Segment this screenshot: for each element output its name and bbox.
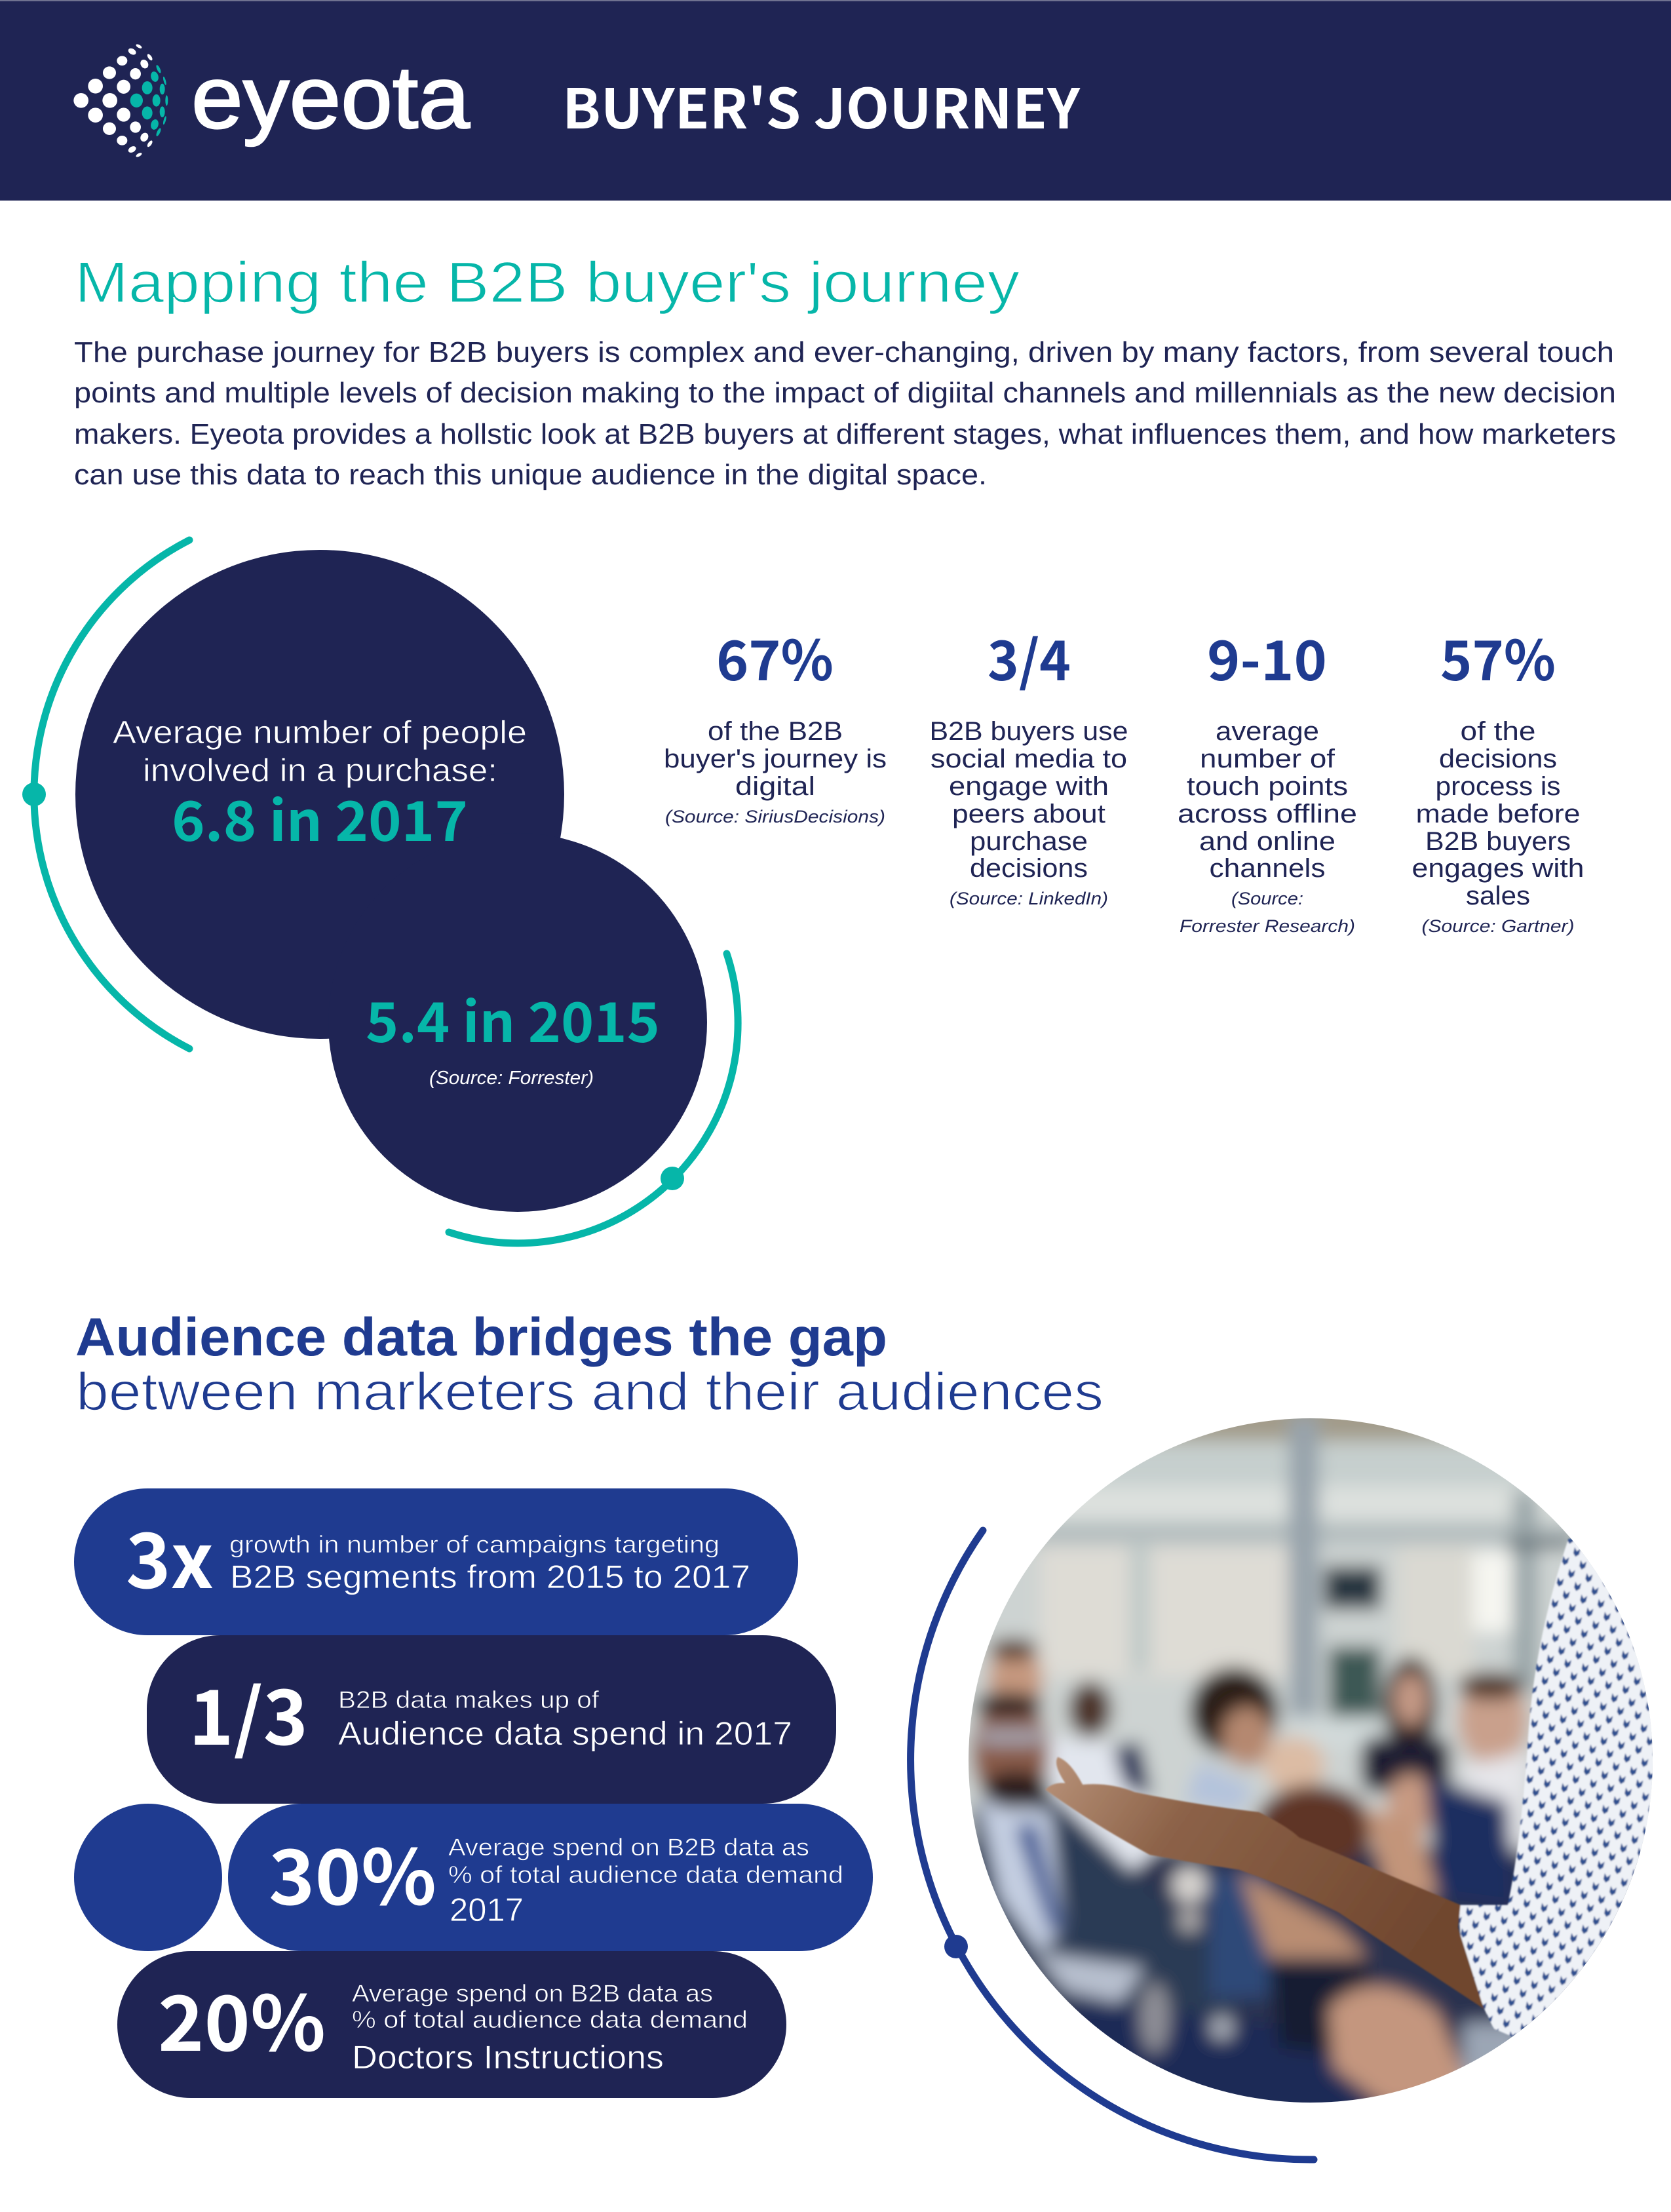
- icon: teal dot on large ring: [22, 783, 46, 806]
- heading: audience data: Audience data bridges the gap: [75, 1308, 887, 1367]
- text: Audience data spend in 2017: [338, 1715, 792, 1752]
- description: (Source: SiriusDecisions): [665, 807, 885, 826]
- description: digital: [735, 772, 815, 801]
- panel: stat 3/4: [929, 617, 1128, 908]
- description: (Source:: [1231, 889, 1303, 908]
- text: % of total audience data demand: [352, 2006, 748, 2033]
- text: % of total audience data demand: [448, 1861, 843, 1888]
- text: purchase caption: [113, 715, 527, 788]
- description: touch points: [1187, 772, 1348, 801]
- text block: introduction paragraph: [74, 336, 1616, 491]
- decorative blue circle: [74, 1804, 222, 1951]
- text block: introduction paragraph: makers. Eyeota provides a hollstic look at B2B buyers at different stages, what influences them, and how marketers: [74, 418, 1616, 450]
- number: 20%: [158, 1963, 326, 2073]
- text: B2B data makes up of: [338, 1686, 600, 1713]
- number: 67%: [716, 617, 834, 697]
- text: [338, 1686, 792, 1752]
- heading: audience data: [75, 1308, 1104, 1422]
- description: Forrester Research): [1180, 916, 1355, 936]
- description: decisions: [970, 854, 1088, 883]
- text: Average spend on B2B data as: [448, 1834, 809, 1861]
- panel: stat 57%: [1412, 617, 1585, 936]
- text: [448, 1834, 843, 1928]
- heading: audience data: between marketers and their audiences: [76, 1362, 1104, 1422]
- text block: introduction paragraph: The purchase journey for B2B buyers is complex and ever-changing, driven by many factors, from several touch: [74, 336, 1614, 368]
- description: buyer's journey is: [664, 745, 887, 773]
- description: [664, 717, 887, 826]
- description: (Source: Gartner): [1422, 916, 1574, 936]
- eyeota wordmark: eyeota: [191, 48, 471, 147]
- description: engage with: [949, 772, 1109, 801]
- description: across offline: [1178, 800, 1357, 828]
- description: B2B buyers use: [929, 717, 1128, 746]
- source: Forrester: (Source: Forrester): [429, 1068, 594, 1089]
- panel: 3x pill: [74, 1488, 798, 1635]
- back row people: [988, 1644, 1043, 1715]
- panel: stat 9-10: [1178, 617, 1357, 936]
- front row: [971, 1786, 1201, 2009]
- circle: 2017: [75, 550, 564, 1039]
- panel: 30% pill: [228, 1804, 873, 1951]
- icon: blue dot on ring: [944, 1935, 968, 1958]
- text: B2B segments from 2015 to 2017: [230, 1559, 750, 1595]
- icon: eyeota dot globe logo: [73, 43, 168, 158]
- panel: header band: [0, 0, 1671, 201]
- number: 3x: [126, 1500, 214, 1610]
- arc: teal ring around large circle: [34, 540, 189, 1049]
- text: [229, 1531, 750, 1595]
- number: 1/3: [189, 1657, 308, 1767]
- description: decisions: [1439, 745, 1557, 773]
- text: purchase caption: Average number of people: [113, 715, 527, 750]
- circle: 2015: [328, 833, 707, 1212]
- description: sales: [1466, 882, 1530, 910]
- description: purchase: [970, 827, 1088, 856]
- icon: teal dot on small ring: [661, 1167, 684, 1190]
- description: number of: [1200, 745, 1335, 773]
- text block: introduction paragraph: points and multiple levels of decision making to the impact of digiital channels and millennials as the new decision: [74, 377, 1616, 409]
- description: average: [1216, 717, 1319, 746]
- description: and online: [1199, 827, 1335, 856]
- text: purchase caption: involved in a purchase:: [143, 753, 497, 788]
- description: channels: [1210, 854, 1325, 883]
- presenter arm and blouse: [1045, 1536, 1671, 2038]
- arc: blue ring around photo: [911, 1530, 1314, 2160]
- description: [1178, 717, 1357, 936]
- number: 30%: [269, 1817, 436, 1927]
- text: growth in number of campaigns targeting: [229, 1531, 720, 1558]
- header title: BUYER'S JOURNEY: [562, 66, 1081, 145]
- description: of the B2B: [708, 717, 843, 746]
- description: [1412, 717, 1585, 936]
- description: peers about: [952, 800, 1105, 828]
- panel: stat 67%: [664, 617, 887, 826]
- text: [352, 1980, 748, 2076]
- panel: people involved in a purchase: [22, 540, 738, 1243]
- number: 3/4: [988, 617, 1071, 697]
- description: engages with: [1412, 854, 1585, 883]
- number: 9-10: [1207, 617, 1327, 697]
- text block: introduction paragraph: can use this data to reach this unique audience in the digital space.: [74, 459, 987, 491]
- text: Average spend on B2B data as: [352, 1980, 713, 2007]
- description: social media to: [931, 745, 1127, 773]
- stat: 6.8 in 2017: 6.8 in 2017: [172, 778, 468, 857]
- photo: presenter gesturing to seated audience: [969, 1418, 1653, 2103]
- number: 57%: [1440, 617, 1556, 697]
- description: made before: [1415, 800, 1581, 828]
- arc: teal ring around small circle: [449, 954, 738, 1243]
- description: [929, 717, 1128, 908]
- panel: 1/3 pill: [147, 1635, 836, 1804]
- heading: mapping the journey: Mapping the B2B buyer's journey: [75, 250, 1020, 315]
- text: 2017: [450, 1892, 524, 1928]
- description: B2B buyers: [1425, 827, 1571, 856]
- description: (Source: LinkedIn): [950, 889, 1108, 908]
- description: of the: [1460, 717, 1536, 746]
- description: process is: [1435, 772, 1561, 801]
- panel: 20% pill: [117, 1951, 786, 2098]
- stat: 5.4 in 2015: 5.4 in 2015: [366, 979, 660, 1058]
- text: Doctors Instructions: [352, 2039, 664, 2076]
